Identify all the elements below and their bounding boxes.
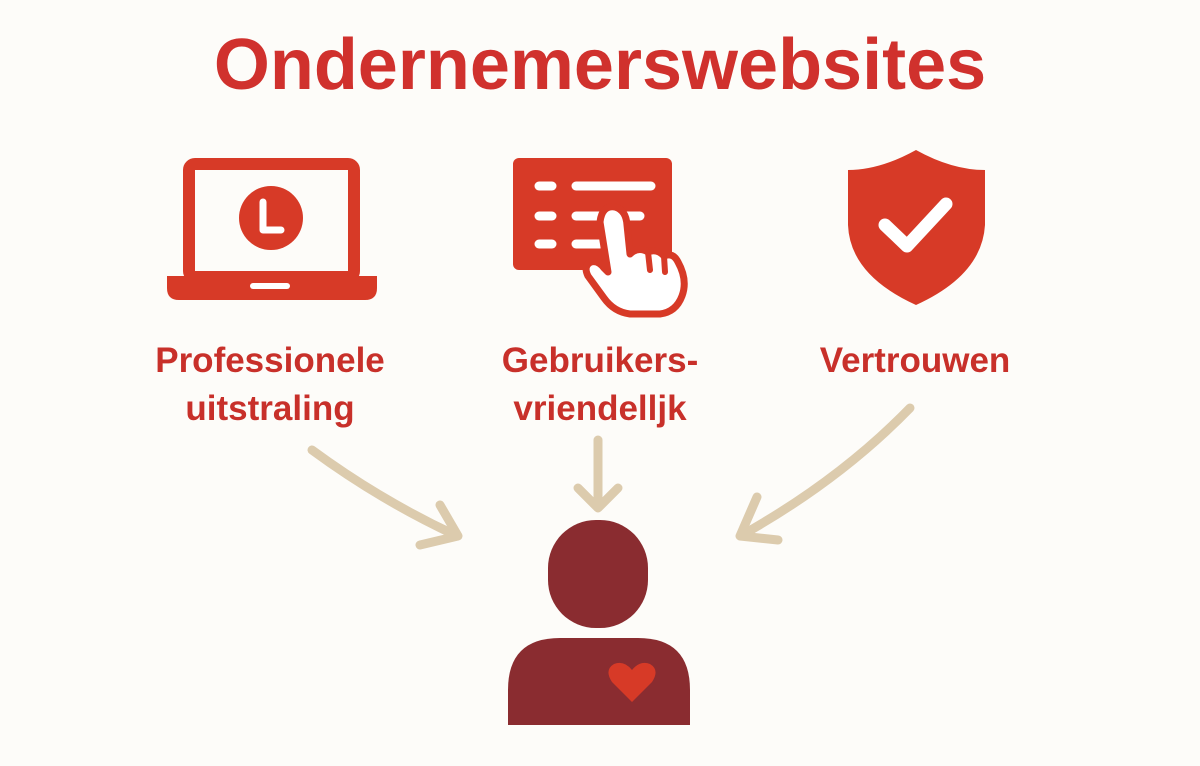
- icon: shield: [848, 150, 985, 305]
- icon: click card: [513, 158, 684, 314]
- title: Ondernemerswebsites: [214, 25, 986, 105]
- label: gebruikersvriendelijk: Gebruikers-: [502, 341, 698, 380]
- arrow: middle: [578, 440, 618, 508]
- label: vertrouwen: Vertrouwen: [820, 341, 1010, 380]
- label: professionele uitstraling: Professionele: [155, 341, 385, 380]
- icon: laptop: [167, 164, 377, 300]
- label: gebruikersvriendelijk: [502, 341, 698, 428]
- icon: person with heart: [508, 520, 690, 725]
- label: professionele uitstraling: uitstraling: [185, 389, 355, 428]
- label: professionele uitstraling: [155, 341, 385, 428]
- arrow: right: [740, 408, 910, 540]
- label: gebruikersvriendelijk: vriendelljk: [513, 389, 687, 428]
- arrow: left: [312, 450, 458, 545]
